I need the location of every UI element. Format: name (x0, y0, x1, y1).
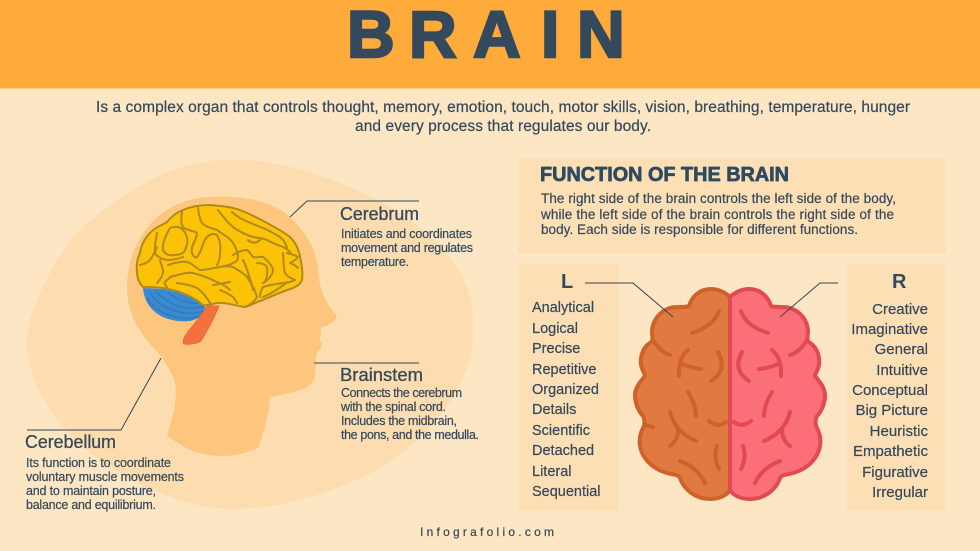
right traits list: Empathetic (853, 443, 928, 460)
text block: cerebellum: Its function is to coordinate (26, 456, 171, 470)
text block: cerebellum: Cerebellum (25, 431, 116, 452)
left traits list: Organized (532, 382, 599, 398)
text block: cerebrum: Cerebrum (340, 203, 419, 224)
function description (540, 191, 896, 237)
left traits list: Logical (532, 321, 578, 337)
right traits list: General (875, 341, 928, 358)
right hemisphere (730, 289, 825, 499)
text block: cerebrum (340, 203, 473, 269)
heading: function of the brain: FUNCTION OF THE BRAIN (540, 164, 789, 186)
text block: cerebellum: and to maintain posture, (26, 484, 156, 498)
right traits list: Irregular (872, 484, 928, 501)
right traits list (851, 301, 928, 501)
text block: brainstem (340, 364, 479, 442)
panel: left brain traits (518, 264, 619, 511)
right traits list: Imaginative (851, 321, 928, 338)
text block: cerebellum: voluntary muscle movements (26, 470, 184, 484)
panel: right brain traits (847, 264, 946, 511)
right traits list: Heuristic (870, 423, 928, 440)
icon: cerebrum (137, 205, 302, 307)
intro text: and every process that regulates our body. (355, 118, 651, 135)
function description: body. Each side is responsible for different functions. (541, 222, 858, 237)
heading: R: R (892, 271, 907, 293)
leader line: cerebellum (27, 358, 161, 430)
left traits list: Literal (532, 464, 572, 480)
leader line: R (780, 283, 838, 317)
left traits list (532, 300, 601, 500)
text block: cerebellum (25, 431, 184, 512)
background blob (27, 160, 474, 509)
left traits list: Scientific (532, 423, 590, 439)
text block: cerebrum: movement and regulates (341, 241, 473, 255)
left traits list: Repetitive (532, 362, 596, 378)
left traits list: Detached (532, 443, 594, 459)
leader line: cerebrum (290, 201, 419, 217)
right traits list: Intuitive (876, 362, 928, 379)
right traits list: Creative (872, 301, 928, 318)
footer credit: Infografolio.com (420, 525, 554, 539)
left traits list: Details (532, 402, 576, 418)
left hemisphere (635, 289, 730, 499)
panel: brain anatomy (27, 160, 474, 509)
icon: brainstem (183, 306, 219, 344)
intro text: Is a complex organ that controls thought, memory, emotion, touch, motor skills, vision, breathing, temperature, hunger (96, 99, 910, 116)
heading: L: L (561, 271, 573, 293)
left traits list: Sequential (532, 484, 601, 500)
right traits list: Big Picture (855, 402, 928, 419)
leader line: L (585, 283, 673, 317)
text block: brainstem: Connects the cerebrum (341, 386, 462, 400)
text block: brainstem: with the spinal cord. (340, 400, 446, 414)
function description: while the left side of the brain controls the right side of the (540, 207, 894, 222)
icon: top view brain (635, 289, 825, 499)
text block: cerebrum: Initiates and coordinates (341, 227, 472, 241)
text block: cerebrum: temperature. (341, 255, 409, 269)
icon: head silhouette (127, 197, 337, 456)
panel: function of the brain (518, 159, 946, 253)
text block: brainstem: Includes the midbrain, (341, 414, 457, 428)
intro text (96, 99, 910, 135)
right traits list: Conceptual (852, 382, 928, 399)
icon: cerebellum (143, 288, 205, 321)
left traits list: Analytical (532, 300, 594, 316)
right traits list: Figurative (862, 464, 928, 481)
header banner (0, 0, 980, 88)
text block: brainstem: Brainstem (340, 364, 423, 385)
function description: The right side of the brain controls the left side of the body, (541, 191, 896, 206)
left traits list: Precise (532, 341, 580, 357)
text block: brainstem: the pons, and the medulla. (341, 428, 479, 442)
text block: cerebellum: balance and equilibrium. (26, 498, 156, 512)
leader line: brainstem (314, 362, 419, 364)
